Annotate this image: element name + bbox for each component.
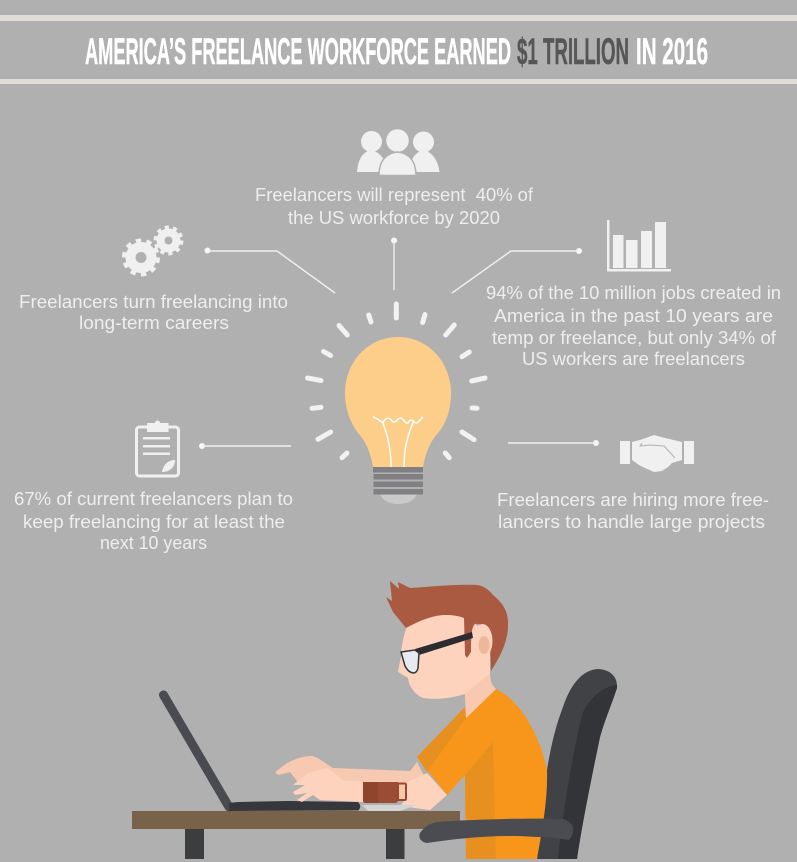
connector: handshake to bulb (508, 440, 599, 446)
title: IN 2016 (636, 31, 708, 72)
title banner (0, 15, 797, 84)
connector: gears to bulb (204, 248, 335, 293)
text: hiring freelancers: lancers to handle large projects (498, 511, 765, 532)
table (132, 811, 460, 859)
ear (472, 624, 492, 658)
text: jobs statistic: temp or freelance, but only 34% of (492, 327, 777, 348)
text: workforce share: Freelancers will represent 40% of (255, 184, 534, 205)
text: jobs statistic: America in the past 10 years are (494, 305, 773, 326)
text: jobs statistic (486, 282, 781, 369)
illustration: freelancer at desk (132, 581, 617, 859)
glasses (401, 632, 473, 673)
text: plans to keep freelancing: keep freelancing for at least the (23, 511, 285, 532)
icon: handshake (620, 435, 694, 472)
icon: people (357, 128, 440, 176)
shirt (417, 689, 547, 859)
coffee mug (362, 782, 417, 811)
laptop (164, 695, 360, 811)
text: jobs statistic: US workers are freelancers (522, 348, 745, 369)
icon: gears (124, 228, 181, 274)
text: long-term careers: Freelancers turn freelancing into (19, 291, 288, 312)
connector: clipboard to bulb (199, 443, 291, 449)
text: long-term careers (19, 291, 288, 333)
text: plans to keep freelancing: 67% of current freelancers plan to (14, 488, 293, 509)
hair (386, 581, 508, 671)
armrest (419, 819, 573, 843)
arms and hands (275, 756, 447, 810)
text: plans to keep freelancing: next 10 years (100, 532, 207, 553)
connector: chart to bulb (452, 248, 582, 293)
bulb rays (308, 304, 485, 458)
icon: light bulb (345, 337, 451, 504)
text: long-term careers: long-term careers (79, 312, 229, 333)
text: hiring freelancers: Freelancers are hiring more free- (497, 489, 769, 510)
connector: people to bulb (391, 238, 397, 290)
text: hiring freelancers (497, 489, 769, 532)
text: plans to keep freelancing (14, 488, 293, 553)
neck and head (398, 613, 496, 718)
text: workforce share: the US workforce by 2020 (288, 207, 500, 228)
chair back (537, 669, 617, 859)
icon: bar chart (607, 220, 671, 272)
text: jobs statistic: 94% of the 10 million jobs created in (486, 282, 781, 303)
text: workforce share (255, 184, 534, 228)
icon: clipboard (136, 420, 178, 476)
title: $1 TRILLION (517, 31, 629, 72)
